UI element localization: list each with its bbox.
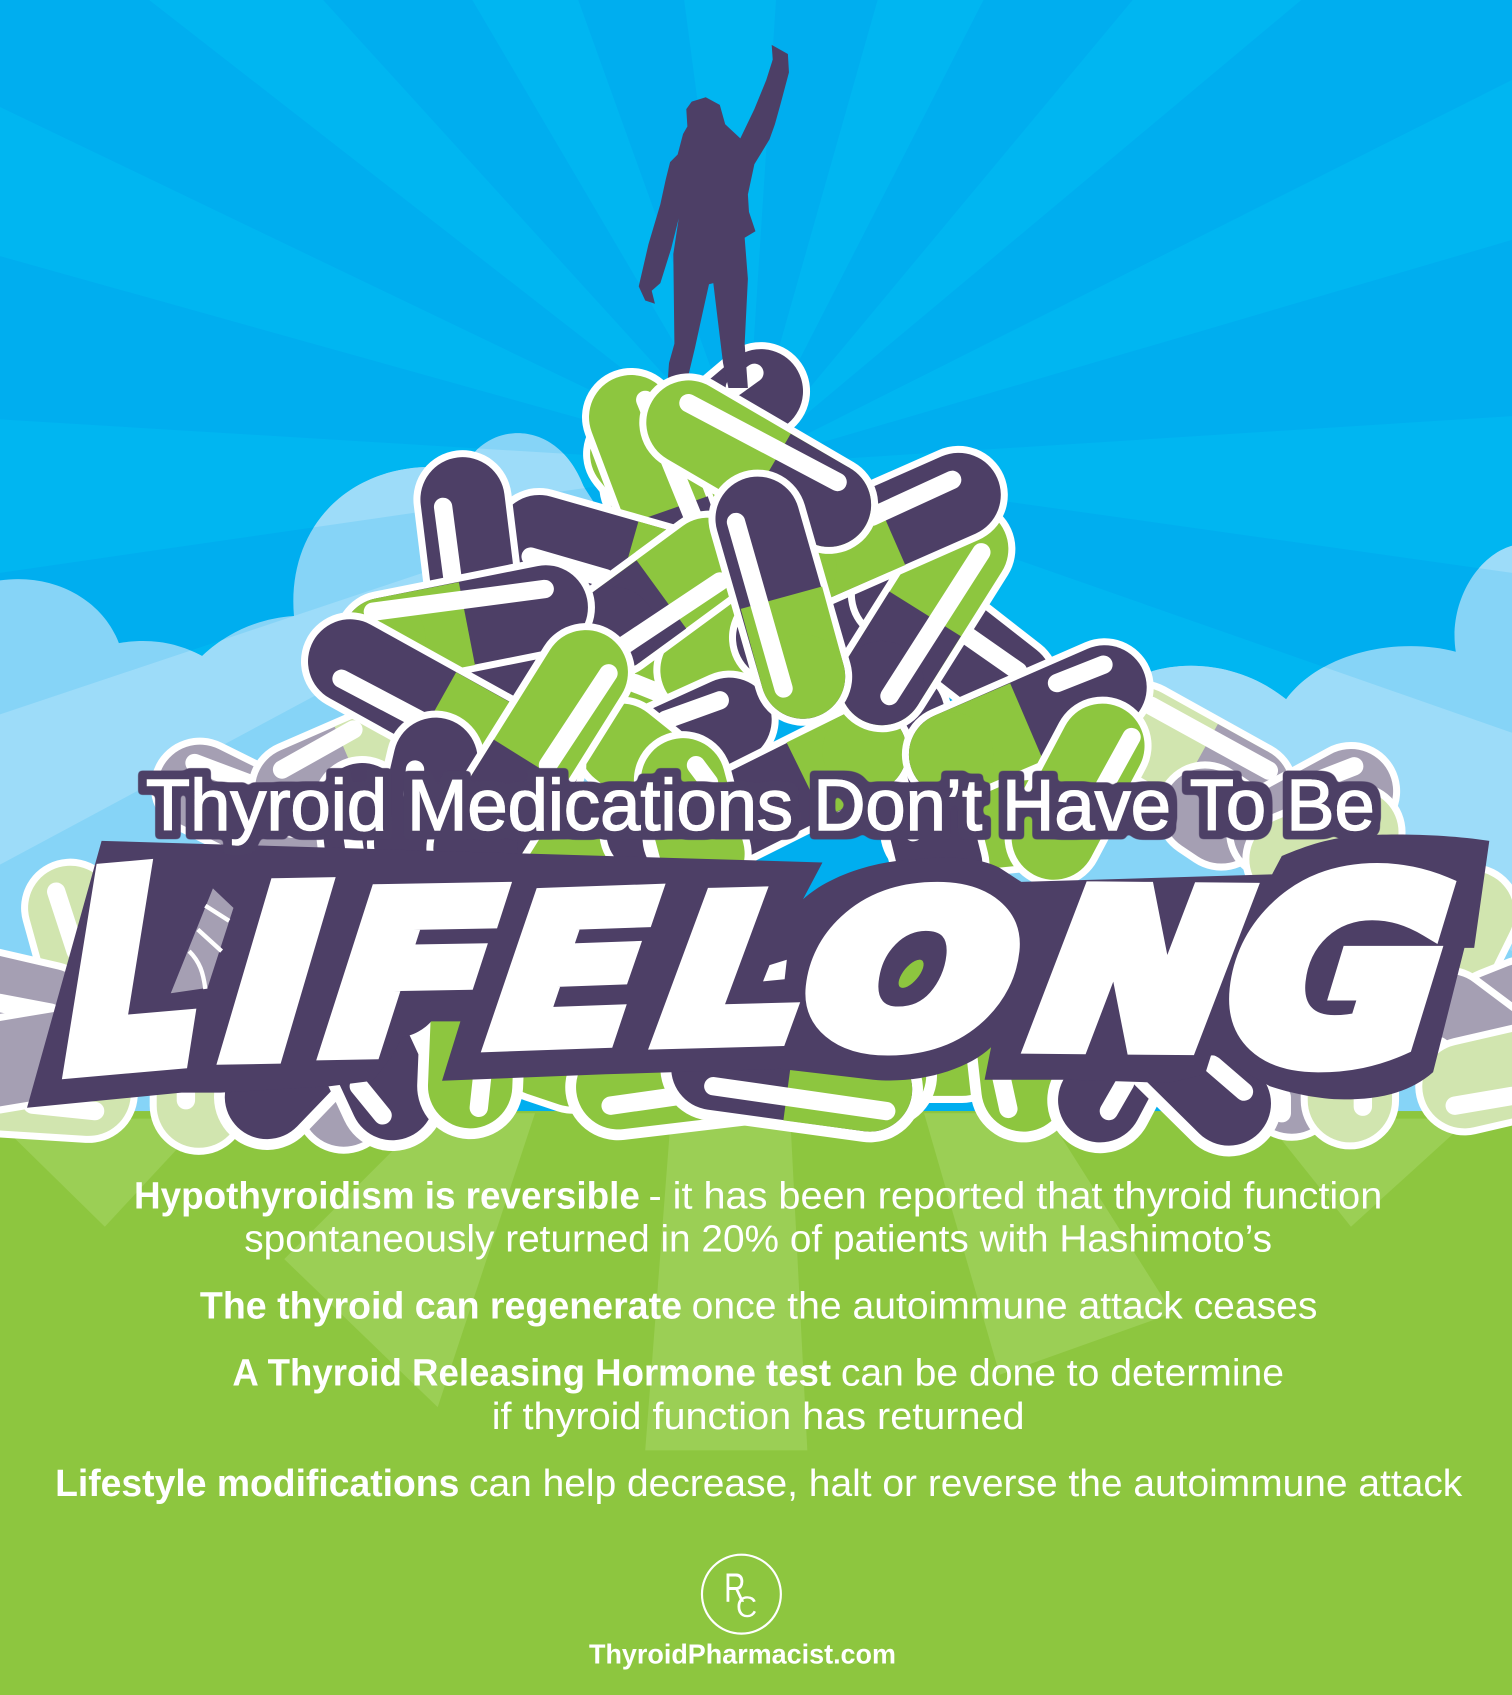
text block: thyroid releasing hormone test: if thyroid function has returned bbox=[492, 1396, 1025, 1438]
pill: green and purple long bbox=[572, 560, 720, 671]
pill: small purple behind left bbox=[476, 675, 508, 735]
pill: purple and green top right bbox=[752, 480, 959, 610]
LIFELONG heading: I bbox=[220, 845, 331, 1108]
LIFELONG heading: L bbox=[68, 813, 202, 1130]
LIFELONG heading: E bbox=[480, 851, 663, 1094]
LIFELONG heading backing shape bbox=[27, 834, 1489, 1108]
text block: thyroid can regenerate: once the autoimmune attack ceases bbox=[692, 1286, 1317, 1328]
website url: ThyroidPharmacist.com bbox=[589, 1638, 896, 1669]
text block: thyroid can regenerate: The thyroid can regenerate bbox=[200, 1286, 682, 1328]
text block: hypothyroidism is reversible bbox=[134, 1175, 1382, 1261]
pill: top purple bbox=[648, 373, 761, 486]
pill: dangling purple right large bbox=[1146, 1021, 1244, 1103]
LIFELONG heading: N bbox=[1024, 850, 1255, 1094]
pill: green cap centre bbox=[683, 765, 709, 854]
sliver of pile in O counter bbox=[894, 956, 928, 992]
pill: dangling green bbox=[470, 951, 486, 1108]
LIFELONG heading: G bbox=[1219, 830, 1459, 1116]
pill: purple cap lower centre bbox=[829, 973, 838, 1081]
title: Thyroid Medications Don’t Have To Be bbox=[146, 765, 1375, 846]
pill: filler green right under title bbox=[929, 821, 1038, 832]
text block: thyroid can regenerate bbox=[200, 1286, 1317, 1328]
pill: filler green lower right bbox=[929, 1008, 962, 1099]
pill: green and purple right long bbox=[840, 549, 981, 725]
green ground with light rays bbox=[0, 1111, 1512, 1695]
silhouette of woman with raised fist bbox=[639, 45, 789, 388]
pill: filler purple under title bbox=[648, 827, 692, 832]
text block: thyroid releasing hormone test: A Thyroid Releasing Hormone test bbox=[232, 1353, 832, 1395]
pill: green lower bbox=[621, 746, 648, 767]
pill: dangling purple left bbox=[267, 1038, 324, 1097]
text block: thyroid releasing hormone test: can be done to determine bbox=[841, 1353, 1284, 1395]
pill: green upper centre bbox=[703, 638, 746, 670]
pill: purple lower right bbox=[886, 713, 940, 865]
logo: RC monogram in circle: R bbox=[724, 1565, 745, 1611]
pill: green and purple top bbox=[688, 403, 871, 547]
pill: dangling purple with highlight bbox=[357, 1021, 392, 1115]
pill: dangling green right bbox=[999, 973, 1023, 1109]
pill pile bbox=[267, 400, 1244, 1132]
pill: purple right bbox=[897, 594, 1018, 683]
pill: purple vertical top left bbox=[443, 499, 476, 605]
text block: lifestyle modifications: Lifestyle modifications bbox=[55, 1463, 459, 1505]
gap between L and O showing pills bbox=[763, 960, 787, 981]
pill: purple under centre bbox=[778, 618, 848, 638]
pill: green right of centre bbox=[881, 951, 884, 1075]
sky background with sun rays bbox=[0, 0, 1512, 1124]
text block: hypothyroidism is reversible: - it has been reported that thyroid function bbox=[648, 1175, 1382, 1217]
pill: purple cap left bbox=[413, 760, 436, 843]
pill: purple and green left horizontal bbox=[342, 589, 546, 682]
text block: thyroid releasing hormone test bbox=[232, 1353, 1284, 1438]
LIFELONG heading: L bbox=[648, 853, 828, 1089]
pill: purple and green horizontal upper bbox=[531, 537, 745, 626]
text block: hypothyroidism is reversible: Hypothyroidism is reversible bbox=[134, 1175, 640, 1217]
LIFELONG heading: F bbox=[316, 846, 509, 1105]
text block: lifestyle modifications: can help decrease, halt or reverse the autoimmune attack bbox=[469, 1463, 1462, 1505]
faded background pills bbox=[0, 693, 1512, 1113]
pill: purple green purple left big bbox=[342, 661, 537, 765]
pill: dangling purple right small bbox=[1100, 994, 1156, 1111]
pill: small green under centre bbox=[584, 643, 661, 694]
pill: purple and green centre bbox=[736, 519, 845, 719]
text block: lifestyle modifications bbox=[55, 1463, 1462, 1505]
pill: green and purple left bbox=[631, 400, 734, 620]
pill: purple lower centre bbox=[648, 700, 730, 757]
pill: purple and green far right bbox=[909, 665, 1105, 797]
pill: filler green lower left bbox=[540, 1054, 573, 1065]
LIFELONG heading bbox=[68, 813, 1459, 1130]
pill: green back bbox=[632, 454, 703, 540]
clouds bbox=[0, 433, 1512, 1112]
logo: RC monogram in circle bbox=[702, 1555, 781, 1634]
pill: lower left purple bbox=[346, 789, 373, 897]
pill: green far right lower bbox=[1054, 737, 1132, 838]
pill: filler green under title bbox=[540, 821, 584, 854]
pill: purple and green lower centre bbox=[692, 709, 907, 838]
pill: purple and green horizontal bbox=[713, 1047, 912, 1132]
logo: RC monogram in circle: C bbox=[736, 1592, 757, 1624]
LIFELONG heading: O bbox=[799, 855, 1025, 1089]
gap between L and I showing pills bbox=[171, 888, 233, 993]
pill: dangling green centre bbox=[611, 1072, 746, 1106]
pill: green and purple front diagonal bbox=[433, 672, 608, 891]
text block: hypothyroidism is reversible: spontaneously returned in 20% of patients with Hashimoto’s bbox=[244, 1219, 1272, 1261]
